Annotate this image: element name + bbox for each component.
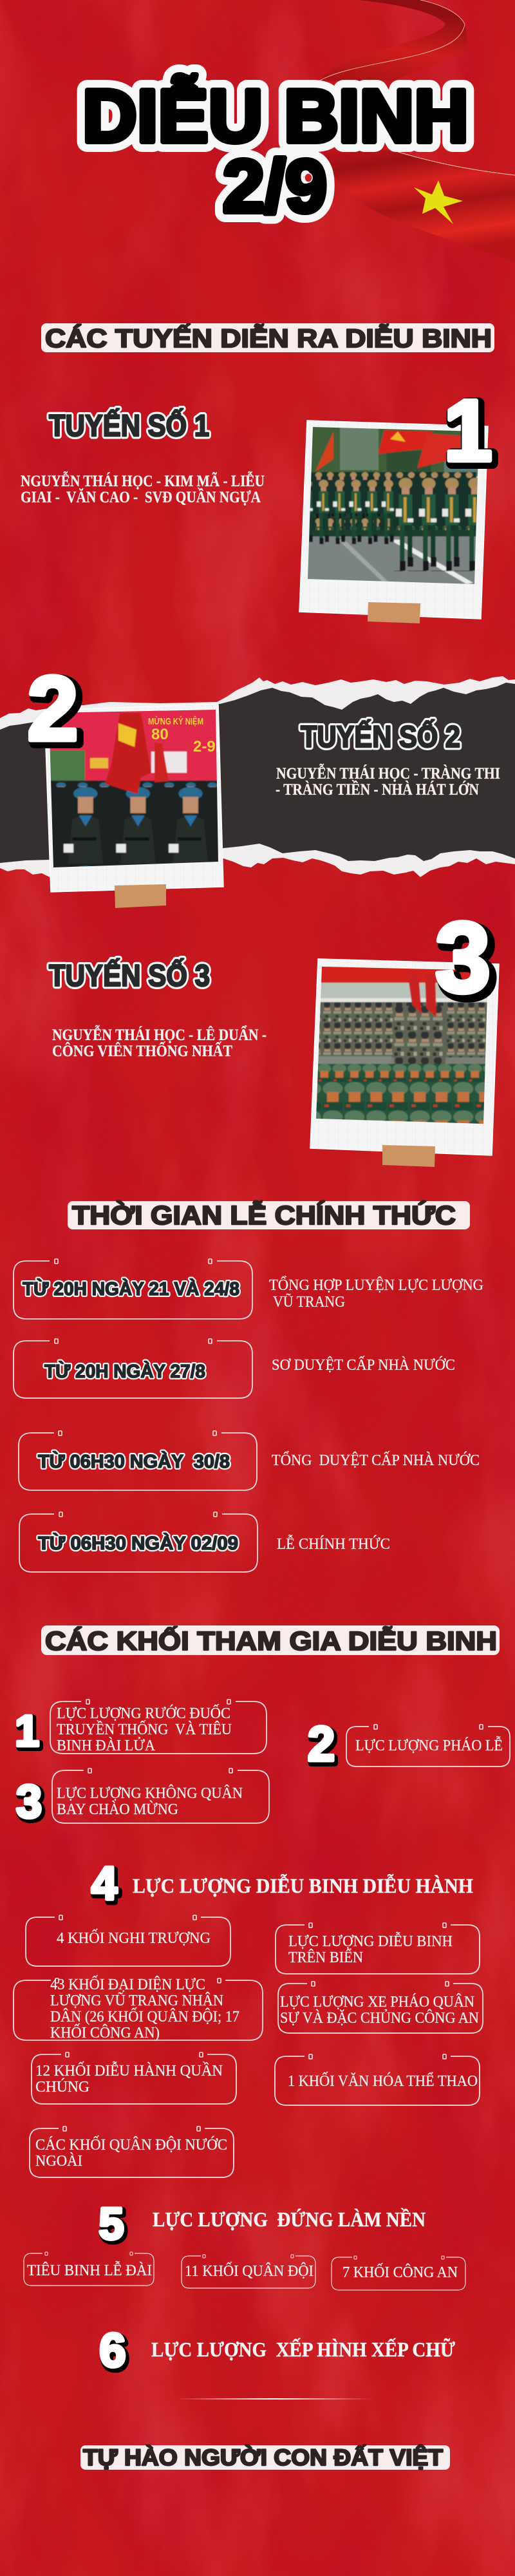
block 1: LỰC LƯỢNG RƯỚC ĐUỐC [57, 1705, 230, 1722]
number 6: 6 [101, 2326, 128, 2380]
title: 2/9 [223, 144, 327, 228]
parade box 2 [276, 1923, 480, 1974]
photo: marching soldiers in green [303, 425, 483, 586]
parade box 7: CÁC KHỐI QUÂN ĐỘI NƯỚC [35, 2136, 227, 2154]
parade box 1 [26, 1915, 230, 1966]
number 1: 1 [444, 382, 492, 479]
route 1 description [21, 471, 265, 506]
title: DIỄU BINH [82, 74, 469, 158]
photo: soldiers saluting with flag: 2-9 [193, 738, 216, 755]
block 1: TRUYỀN THỐNG VÀ TIÊU [57, 1721, 232, 1738]
number 4: 4 [93, 1861, 119, 1912]
timeline item 1: TỔNG HỢP LUYỆN LỰC LƯỢNG [269, 1276, 483, 1294]
timeline item 2: SƠ DUYỆT CẤP NHÀ NƯỚC [272, 1356, 455, 1374]
route 2 description: - TRÀNG TIỀN - NHÀ HÁT LỚN [276, 780, 479, 799]
parade box 4: SỰ VÀ ĐẶC CHỦNG CÔNG AN [280, 2009, 479, 2027]
timeline item 4: LỄ CHÍNH THỨC [277, 1535, 390, 1553]
small box 1 [24, 2252, 154, 2286]
number 1: 1 [446, 384, 495, 482]
route 2 title: TUYẾN SỐ 2 [301, 719, 460, 753]
small box 2 [182, 2255, 315, 2288]
tape [115, 884, 166, 908]
block 3: BAY CHÀO MỪNG [57, 1801, 178, 1818]
route 3 description: CÔNG VIÊN THỐNG NHẤT [52, 1041, 232, 1060]
number 3 small: 3 [16, 1776, 42, 1828]
number 5: 5 [99, 2199, 124, 2249]
number 5: 5 [101, 2201, 126, 2251]
torn dark band [0, 676, 515, 877]
timeline item 4 [19, 1512, 390, 1572]
block 1: BINH ĐÀI LỬA [57, 1738, 156, 1754]
heading: background force: LỰC LƯỢNG ĐỨNG LÀM NỀN [153, 2208, 426, 2231]
closing slogan: TỰ HÀO NGƯỜI CON ĐẤT VIỆT [83, 2445, 443, 2470]
title: DIỄU BINH [82, 74, 469, 158]
route 3 description [52, 1025, 267, 1060]
timeline item 2 [14, 1339, 455, 1398]
block 3 [16, 1768, 269, 1830]
timeline item 3: TỪ 06H30 NGÀY 30/8 [38, 1450, 230, 1472]
number 2 small: 2 [308, 1717, 335, 1772]
timeline item 3: TỪ 06H30 NGÀY 30/8 [38, 1450, 230, 1472]
photo: parade formation [314, 965, 491, 1126]
title [82, 74, 469, 228]
timeline item 1: VŨ TRANG [273, 1293, 345, 1311]
photo: soldiers saluting with flag: MỪNG KỶ NIỆM [148, 715, 203, 727]
timeline item 2: TỪ 20H NGÀY 27/8 [44, 1360, 205, 1382]
heading: routes: CÁC TUYẾN DIỄN RA DIỄU BINH [45, 323, 492, 353]
number 3: 3 [435, 902, 491, 1013]
parade box 3: KHỐI CÔNG AN) [50, 2024, 160, 2041]
heading: parade force: LỰC LƯỢNG DIỄU BINH DIỄU HÀNH [133, 1874, 473, 1897]
parade box 6: 1 KHỐI VĂN HÓA THỂ THAO [288, 2072, 478, 2090]
parade box 5: CHÚNG [35, 2078, 89, 2096]
parade box 3: LƯỢNG VŨ TRANG NHÂN [50, 1992, 223, 2009]
route 3 title: TUYẾN SỐ 3 [49, 958, 210, 992]
route 3 description: NGUYỄN THÁI HỌC - LÊ DUẨN - [52, 1025, 267, 1044]
small box 2: 11 KHỐI QUÂN ĐỘI [185, 2262, 314, 2280]
heading: official time: THỜI GIAN LỄ CHÍNH THỨC [72, 1200, 456, 1230]
small box 1: TIÊU BINH LỄ ĐÀI [27, 2262, 152, 2279]
parade box 4 [278, 1982, 483, 2033]
parade box 7: NGOÀI [35, 2153, 82, 2170]
block 1 [15, 1700, 267, 1757]
number 4: 4 [91, 1858, 117, 1909]
number 3: 3 [440, 906, 495, 1018]
timeline item 3: TỔNG DUYỆT CẤP NHÀ NƯỚC [272, 1452, 480, 1469]
parade box 5 [32, 2052, 236, 2104]
photo: soldiers saluting with flag [45, 708, 222, 871]
timeline item 1 [14, 1259, 483, 1319]
block 2: LỰC LƯỢNG PHÁO LỄ [355, 1737, 503, 1754]
route 1 title: TUYẾN SỐ 1 [49, 408, 209, 442]
photo: soldiers saluting with flag: 80 [151, 726, 169, 743]
tape [382, 1145, 435, 1167]
parade box 3: 43 KHỐI ĐẠI DIỆN LỰC [50, 1976, 205, 1993]
number 1 small: 1 [15, 1707, 39, 1756]
parade box 2: LỰC LƯỢNG DIỄU BINH [288, 1933, 453, 1950]
parade box 3 [14, 1976, 263, 2041]
title: 2/9 [223, 144, 327, 228]
flag ribbon with star [319, 0, 515, 261]
timeline item 2: TỪ 20H NGÀY 27/8 [44, 1360, 205, 1382]
route 2 title: TUYẾN SỐ 2 [301, 719, 460, 753]
heading: participating blocks: CÁC KHỐI THAM GIA DIỄU BINH [45, 1626, 497, 1656]
route 1 title: TUYẾN SỐ 1 [49, 408, 209, 442]
parade box 1: 4 KHỐI NGHI TRƯỢNG [57, 1929, 211, 1947]
number 2: 2 [28, 658, 78, 760]
tape [368, 602, 420, 623]
small box 3 [332, 2256, 465, 2290]
number 6: 6 [99, 2324, 126, 2377]
parade box 3: DÂN (26 KHỐI QUÂN ĐỘI; 17 [50, 2008, 239, 2025]
parade box 7 [30, 2126, 234, 2177]
timeline item 4: TỪ 06H30 NGÀY 02/09 [38, 1532, 238, 1554]
block 3: LỰC LƯỢNG KHÔNG QUÂN [57, 1785, 243, 1802]
number 2 small: 2 [310, 1719, 337, 1774]
parade box 6 [275, 2054, 480, 2105]
small box 3: 7 KHỐI CÔNG AN [342, 2264, 458, 2281]
parade box 4: LỰC LƯỢNG XE PHÁO QUÂN [280, 1994, 474, 2011]
polaroid photo 1 [299, 421, 488, 623]
route 1 description: GIAI - VĂN CAO - SVĐ QUẦN NGỰA [21, 488, 261, 506]
route 1 description: NGUYỄN THÁI HỌC - KIM MÃ - LIỄU [21, 471, 265, 490]
polaroid photo 2 [44, 704, 223, 908]
number 3 small: 3 [18, 1778, 44, 1830]
timeline item 3 [19, 1431, 480, 1490]
timeline item 1: TỪ 20H NGÀY 21 VÀ 24/8 [23, 1278, 239, 1300]
number 1 small: 1 [17, 1709, 41, 1757]
polaroid photo 3 [310, 959, 499, 1167]
heading: formation force: LỰC LƯỢNG XẾP HÌNH XẾP CHỮ [151, 2338, 455, 2361]
number 2: 2 [32, 661, 82, 763]
route 3 title: TUYẾN SỐ 3 [49, 958, 210, 992]
parade box 2: TRÊN BIỂN [288, 1949, 363, 1966]
timeline item 1: TỪ 20H NGÀY 21 VÀ 24/8 [23, 1278, 239, 1300]
timeline item 4: TỪ 06H30 NGÀY 02/09 [38, 1532, 238, 1554]
route 2 description [276, 764, 500, 799]
icon: yellow star [414, 180, 463, 224]
block 2 [308, 1717, 510, 1774]
parade box 5: 12 KHỐI DIỄU HÀNH QUẦN [35, 2062, 223, 2079]
